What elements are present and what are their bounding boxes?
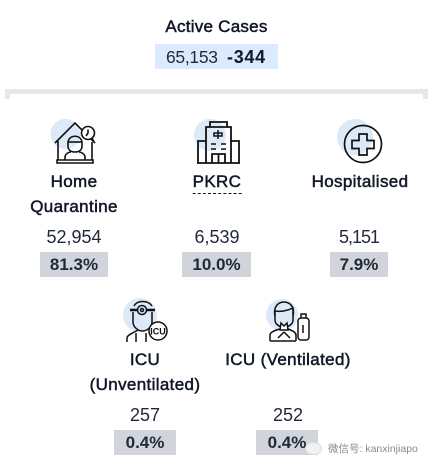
percent: ICU ventilated (256, 430, 318, 455)
value: ICU ventilated: 252 (273, 405, 303, 425)
watermark text: 微信号: kanxinjiapo (328, 443, 418, 455)
icon: wechat bubble (305, 442, 322, 455)
percent: ICU unventilated: 0.4% (126, 433, 164, 452)
heading: ICU unventilated: ICU (130, 350, 160, 369)
icon: home quarantine (50, 119, 96, 164)
value: home quarantine: 52,954 (46, 227, 102, 247)
percent: hospitalised (330, 252, 388, 277)
percent: home quarantine (40, 252, 108, 277)
total active cases value box (155, 44, 278, 69)
total active cases value box: 65,153 (166, 47, 218, 67)
total active cases value box: -344 (227, 47, 266, 67)
watermark (305, 442, 418, 455)
heading: home quarantine: Home (51, 172, 97, 191)
percent: ICU unventilated (114, 430, 176, 455)
heading: PKRC: PKRC (193, 172, 241, 191)
icon: ICU doctor: ICU (150, 326, 166, 336)
percent: hospitalised: 7.9% (340, 255, 378, 274)
value: ICU unventilated: 257 (130, 405, 160, 425)
text: (Unventilated) (90, 375, 200, 394)
percent: ICU ventilated: 0.4% (268, 433, 306, 452)
percent: PKRC (182, 252, 251, 277)
text: Quarantine (30, 197, 118, 216)
icon: ICU doctor (123, 298, 168, 342)
bracket (5, 89, 428, 99)
icon: medical cross (337, 119, 382, 164)
percent: PKRC: 10.0% (192, 255, 241, 274)
value: PKRC: 6,539 (194, 227, 240, 247)
value: hospitalised: 5,151 (339, 227, 379, 247)
icon: hospital (194, 119, 240, 164)
icon: ventilated patient (266, 299, 310, 342)
percent: home quarantine: 81.3% (50, 255, 98, 274)
heading: hospitalised: Hospitalised (312, 172, 408, 191)
title: Active Cases (165, 17, 268, 36)
heading: ICU ventilated: ICU (Ventilated) (225, 350, 351, 369)
